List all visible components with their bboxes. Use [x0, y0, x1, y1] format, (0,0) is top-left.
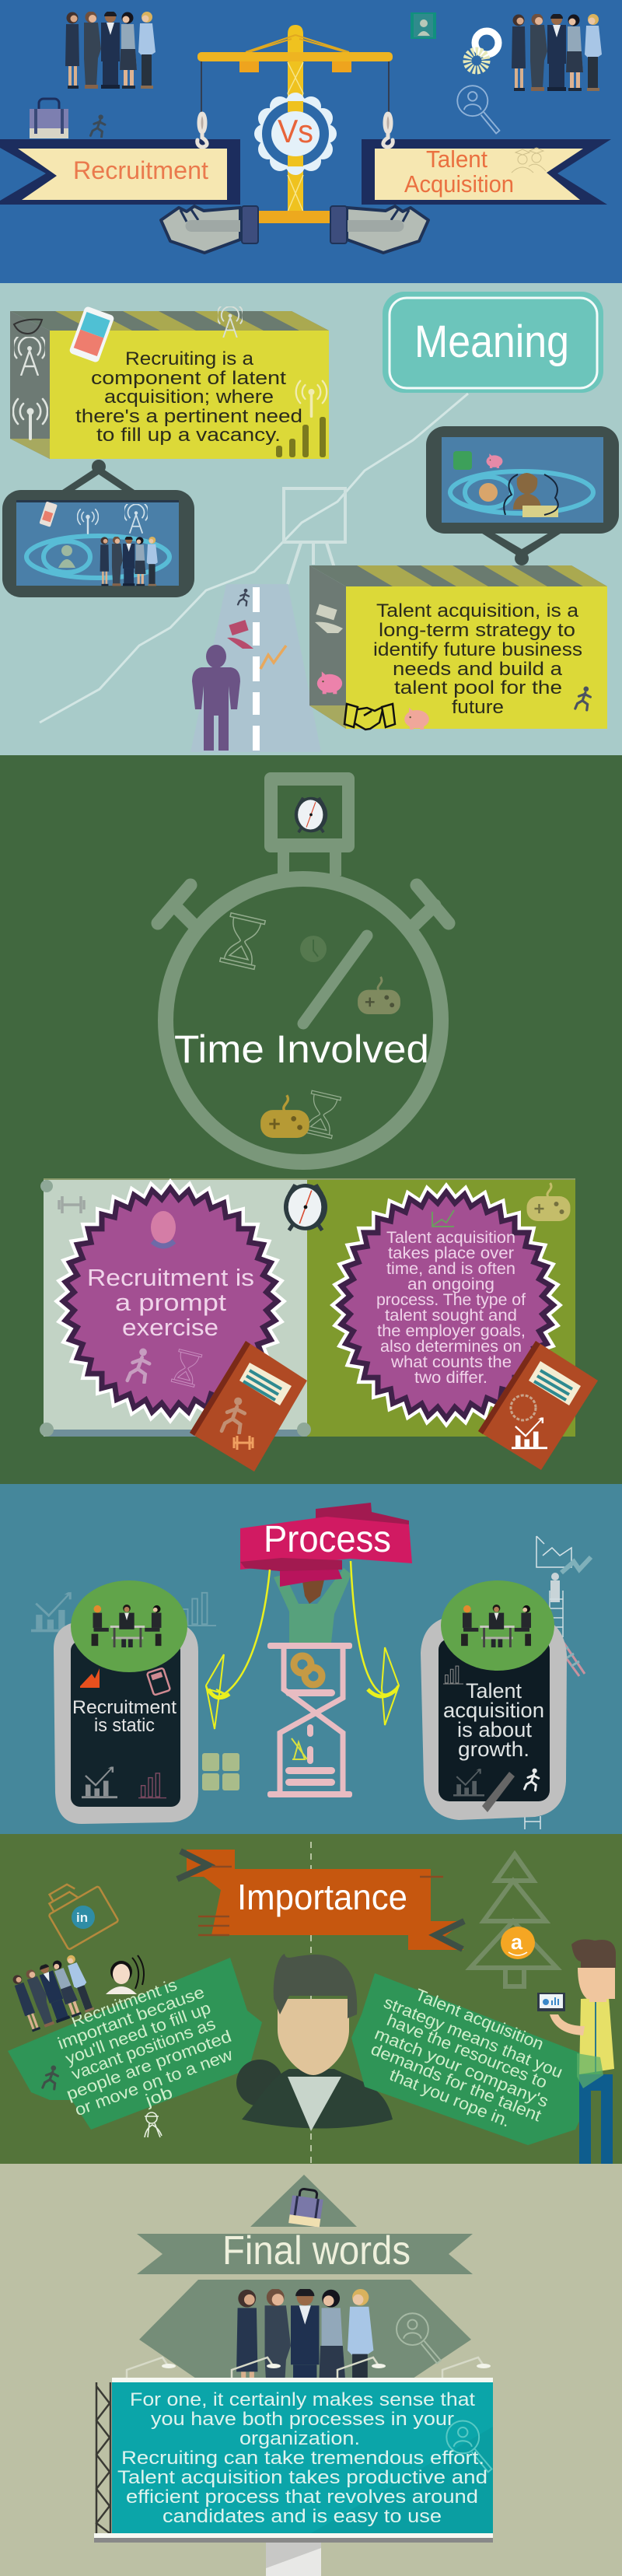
- icons: inside stopwatch: [220, 913, 400, 1139]
- box: recruiting definition: component of latent: [91, 368, 286, 389]
- billboard with conclusion text: efficient process that revolves around: [126, 2487, 478, 2508]
- badge: Vs: Vs: [278, 113, 313, 149]
- billboard with conclusion text: organization.: [239, 2428, 360, 2449]
- badge: talent acquisition over time: the employer goals,: [377, 1322, 526, 1340]
- icon: alarm clock: [284, 1184, 327, 1230]
- badge: Vs: [254, 93, 337, 175]
- illustration: left hand: [161, 206, 258, 253]
- callout: talent acquisition importance: strategy means that you: [381, 1993, 565, 2082]
- card: talent acquisition growth: growth.: [458, 1738, 529, 1761]
- badge: recruitment is prompt: Recruitment is: [87, 1264, 254, 1291]
- billboard with conclusion text: candidates and is easy to use: [162, 2506, 442, 2527]
- icon: crane hooks: [197, 114, 393, 147]
- heading: meaning: [383, 292, 603, 393]
- illustration: central man avatar: [236, 1954, 393, 2131]
- box: talent acquisition definition: long-term strategy to: [379, 620, 575, 641]
- callout: recruitment importance: you'll need to fill up: [63, 1998, 213, 2068]
- illustration: hourglass: [267, 1643, 352, 1797]
- card: talent acquisition growth: [421, 1580, 567, 1820]
- box: talent acquisition definition: Talent acquisition, is a: [376, 600, 579, 621]
- heading: final words: [137, 2228, 473, 2274]
- icon: running figure: [90, 114, 105, 137]
- banner: importance: Importance: [237, 1877, 407, 1917]
- icon: dumbbell: [59, 1196, 84, 1213]
- icon: amazon badge: [501, 1927, 535, 1959]
- callout: talent acquisition importance: Talent acquisition: [413, 1985, 547, 2054]
- billboard with conclusion text: you have both processes in your: [151, 2409, 454, 2430]
- icon: amazon badge: a: [511, 1930, 523, 1954]
- card: recruitment is static: Recruitment: [72, 1697, 176, 1718]
- callout: recruitment importance: important because: [55, 1983, 207, 2053]
- banner: recruitment: Recruitment: [73, 156, 208, 184]
- callout: talent acquisition importance: match your company's: [372, 2025, 551, 2111]
- box: talent acquisition definition: identify future business: [373, 639, 582, 660]
- illustration: person holding banner: [274, 1568, 351, 1643]
- badge: talent acquisition over time: also determines on: [380, 1338, 522, 1356]
- badge: talent acquisition over time: time, and is often: [386, 1260, 515, 1278]
- chart line: [40, 394, 468, 723]
- banner: recruitment: [0, 139, 240, 205]
- divider line: [310, 1842, 312, 2164]
- box: talent acquisition definition: needs and build a: [393, 659, 563, 680]
- billboard with conclusion text: Talent acquisition takes productive and: [117, 2467, 487, 2488]
- book: left: [190, 1341, 307, 1472]
- icon: growth chart on road: [260, 646, 286, 669]
- badge: talent acquisition over time: talent sought and: [385, 1307, 517, 1325]
- box: recruiting definition: there's a pertinent need: [75, 406, 302, 427]
- icons: side of box one: [13, 303, 243, 439]
- box: recruiting definition: acquisition; where: [104, 387, 274, 408]
- heading: meaning: Meaning: [414, 317, 569, 367]
- icon: linkedin folder: [40, 1871, 119, 1950]
- billboard with conclusion text: For one, it certainly makes sense that: [130, 2389, 475, 2410]
- callout: recruitment importance: job: [142, 2083, 175, 2110]
- panel: hero recruitment vs talent acquisition: [0, 0, 622, 283]
- callout: recruitment importance: people are promoted: [64, 2027, 234, 2104]
- badge: talent acquisition over time: two differ.: [414, 1369, 487, 1387]
- screen: talent pool: [426, 426, 619, 565]
- shape: hexagon with team: [139, 2280, 471, 2406]
- billboard with conclusion text: Recruiting can take tremendous effort.: [121, 2448, 484, 2469]
- illustration: crane scale: [197, 25, 393, 223]
- shape: triangle with briefcase: [250, 2175, 357, 2228]
- callout: recruitment importance: vacant positions as: [69, 2014, 218, 2084]
- callout: talent acquisition importance: have the resources to: [384, 2011, 550, 2092]
- callout: talent acquisition importance: demands for the talent: [369, 2040, 544, 2125]
- heading: time involved: Time Involved: [174, 1027, 429, 1071]
- box: talent acquisition definition: talent pool for the: [394, 677, 562, 698]
- heading: final words: Final words: [222, 2228, 411, 2273]
- badge: talent acquisition over time: Talent acquisition: [386, 1229, 515, 1247]
- icon: portrait card: [411, 12, 436, 39]
- road with signpost: [190, 488, 345, 752]
- card: recruitment is static: is static: [94, 1715, 155, 1736]
- banner: talent acquisition: Acquisition: [404, 170, 514, 198]
- banner: process: [240, 1503, 412, 1587]
- icon: signal bars: [276, 417, 326, 457]
- callout: talent acquisition importance: that you rope in.: [387, 2065, 513, 2131]
- card: talent acquisition growth: acquisition: [443, 1699, 544, 1722]
- panel: final words: [0, 2164, 622, 2576]
- badge: talent acquisition over time: what counts the: [390, 1353, 512, 1371]
- icon: right group of people: [512, 13, 602, 91]
- icon: magnifier: [457, 86, 499, 134]
- box: recruiting definition: Recruiting is a: [125, 348, 254, 369]
- icon: wifi antenna: [296, 381, 327, 416]
- arrows: yellow ropes: [206, 1561, 399, 1729]
- card: talent acquisition growth: is about: [457, 1718, 532, 1741]
- banner: talent acquisition: [362, 139, 611, 205]
- panel: time involved: [0, 755, 622, 1484]
- callout: recruitment importance: [8, 1958, 262, 2130]
- icon: walkers: [238, 589, 590, 710]
- callout: recruitment importance: Recruitment is: [68, 1976, 180, 2031]
- box: talent acquisition definition: [309, 565, 607, 729]
- icon: gamepad right: [527, 1183, 571, 1221]
- icon: alarm clock in crown: [295, 797, 327, 832]
- banner: talent acquisition: Talent: [426, 145, 487, 173]
- badge: talent acquisition over time: [330, 1182, 563, 1428]
- badge: recruitment is prompt: a prompt: [115, 1289, 226, 1316]
- box: recruiting definition: to fill up a vacancy.: [96, 425, 281, 446]
- panel: meaning: [0, 283, 622, 755]
- callout: recruitment importance: or move on to a new: [72, 2045, 236, 2119]
- card: recruitment is static: [54, 1580, 198, 1824]
- badge: recruitment is prompt: exercise: [122, 1314, 218, 1341]
- icons: ghost charts behind left card: [31, 1592, 216, 1632]
- billboard with conclusion text: [94, 2378, 493, 2576]
- banner: importance: [177, 1850, 464, 1950]
- icon: calculator keys: [202, 1753, 239, 1790]
- screen: recruitment team: [2, 460, 194, 597]
- icon: gears: [467, 31, 498, 70]
- icons: people row and worker: [10, 1952, 162, 2137]
- book: right: [478, 1341, 598, 1470]
- illustration: man with tablet: [537, 1939, 616, 2164]
- figure: purple person: [192, 645, 240, 751]
- badge: talent acquisition over time: an ongoing: [407, 1276, 494, 1293]
- box: talent acquisition definition: future: [452, 697, 504, 718]
- icon: briefcase: [30, 99, 68, 138]
- illustration: right hand: [330, 206, 428, 253]
- icon: christmas tree: [470, 1854, 557, 1986]
- panel: process: [0, 1484, 622, 1834]
- banner: process: Process: [264, 1519, 391, 1560]
- panel: comparison book: [40, 1178, 575, 1437]
- billboard lamps: [127, 2357, 491, 2378]
- box: recruiting definition: [10, 311, 329, 459]
- icon: factory, painter and ladders: [525, 1536, 591, 1829]
- badge: recruitment is prompt: [54, 1178, 287, 1424]
- icon: piggy banks and money: [227, 604, 429, 730]
- icon: smartphone: [68, 306, 115, 363]
- card: talent acquisition growth: Talent: [466, 1679, 522, 1703]
- badge: talent acquisition over time: process. The type of: [376, 1291, 526, 1309]
- panel: importance: [0, 1834, 622, 2164]
- icon: handshake: [344, 704, 395, 730]
- illustration: stopwatch: [158, 772, 449, 1162]
- icon: left group of people: [65, 11, 156, 89]
- callout: talent acquisition importance: [351, 1973, 605, 2145]
- badge: talent acquisition over time: takes place over: [388, 1244, 514, 1262]
- icon: linkedin folder: in: [76, 1910, 88, 1925]
